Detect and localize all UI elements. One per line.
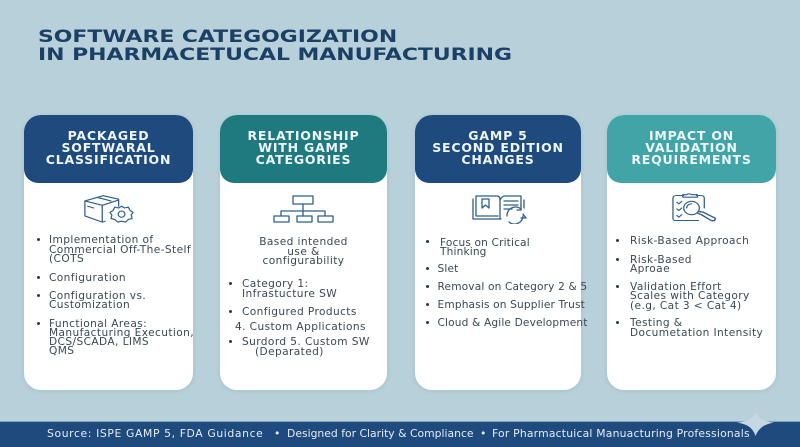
intro text: use & [287,246,320,258]
heading: relationship with gamp categories [220,115,387,183]
bullet list: Risk-Based Approach [630,235,749,247]
heading: packaged softwaral classification: CLASSIFICATION [46,152,171,167]
heading: impact on validation requirements: IMPACT ON [649,128,734,143]
intro text: Surdord 5. Custom SW [242,336,370,348]
title: SOFTWARE CATEGOGIZATION [38,27,397,46]
icon: sparkle star [737,412,774,436]
icon: box with gear [84,195,134,223]
bullet list: Documetation Intensity [630,327,763,339]
title: IN PHARMACETUCAL MANUFACTURING [38,45,512,64]
heading: relationship with gamp categories: RELATIONSHIP [248,128,359,143]
bullet list: Thinking [440,246,487,258]
heading: impact on validation requirements: VALIDATION [645,140,738,155]
intro text: (Deparated) [255,346,324,358]
intro text: configurability [263,255,344,267]
footer source text: • [480,427,486,440]
bullet list: Cloud & Agile Development [438,317,588,329]
bullet list [426,237,588,329]
bullet list: Testing & [630,317,682,329]
bullet list: Aproae [630,263,670,275]
intro text: Infrastucture SW [242,288,337,300]
footer bar [0,421,800,447]
bullet list: Risk-Based [630,254,692,266]
bullet list: (e.g, Cat 3 < Cat 4) [630,300,742,312]
intro text: Configured Products [242,306,357,318]
footer source text: Designed for Clarity & Compliance [287,427,474,440]
bullet list: Removal on Category 2 & 5 [438,281,587,293]
icon: clipboard with magnifying glass [672,193,716,222]
bullet list: Emphasis on Supplier Trust [438,299,585,311]
panel: impact on validation requirements [607,115,776,390]
heading: relationship with gamp categories: WITH GAMP [258,140,349,155]
heading: impact on validation requirements: REQUIREMENTS [631,152,752,167]
bullet list: (COTS [49,253,84,265]
bullet list: Commercial Off-The-Stelf [49,244,191,256]
heading: gamp 5 second edition changes: CHANGES [461,152,535,167]
title [38,27,512,64]
bullet list [37,234,194,357]
footer source text: For Pharmactuical Manuacturing Professionals [492,427,750,440]
bullet list: Customization [49,299,130,311]
heading: packaged softwaral classification: PACKAGED [68,128,149,143]
bullet list: Configuration vs. [49,290,146,302]
heading: packaged softwaral classification: SOFTWARAL [61,140,156,155]
panel: packaged software classification [24,115,193,390]
footer source text [47,427,750,440]
icon: open book with refresh arrows [472,195,527,224]
bullet list: Slet [438,263,458,275]
heading: packaged softwaral classification [24,115,193,183]
bullet list: Validation Effort [630,281,722,293]
intro text: Category 1: [242,278,308,290]
footer source text: • [274,427,280,440]
bullet list: QMS [49,345,74,357]
heading: impact on validation requirements [607,115,776,183]
bullet list: DCS/SCADA, LIMS [49,336,149,348]
panel: relationship with GAMP categories [220,115,387,390]
bullet list: Functional Areas: [49,318,147,330]
heading: gamp 5 second edition changes: SECOND EDITION [432,140,564,155]
intro text: 4. Custom Applications [235,321,366,333]
bullet list: Focus on Critical [440,237,530,249]
intro text: Based intended [259,236,348,248]
heading: gamp 5 second edition changes: GAMP 5 [468,128,528,143]
bullet list [616,235,763,339]
icon: hierarchy diagram [273,195,334,223]
bullet list: Configuration [49,272,126,284]
panel: GAMP 5 second edition changes [415,115,581,390]
bullet list: Implementation of [49,234,154,246]
heading: gamp 5 second edition changes [415,115,581,183]
bullet list: Scales with Category [630,290,750,302]
intro text [229,236,370,358]
heading: relationship with gamp categories: CATEGORIES [256,152,351,167]
footer source text: Source: ISPE GAMP 5, FDA Guidance [47,427,263,440]
bullet list: Manufacturing Execution, [49,327,194,339]
